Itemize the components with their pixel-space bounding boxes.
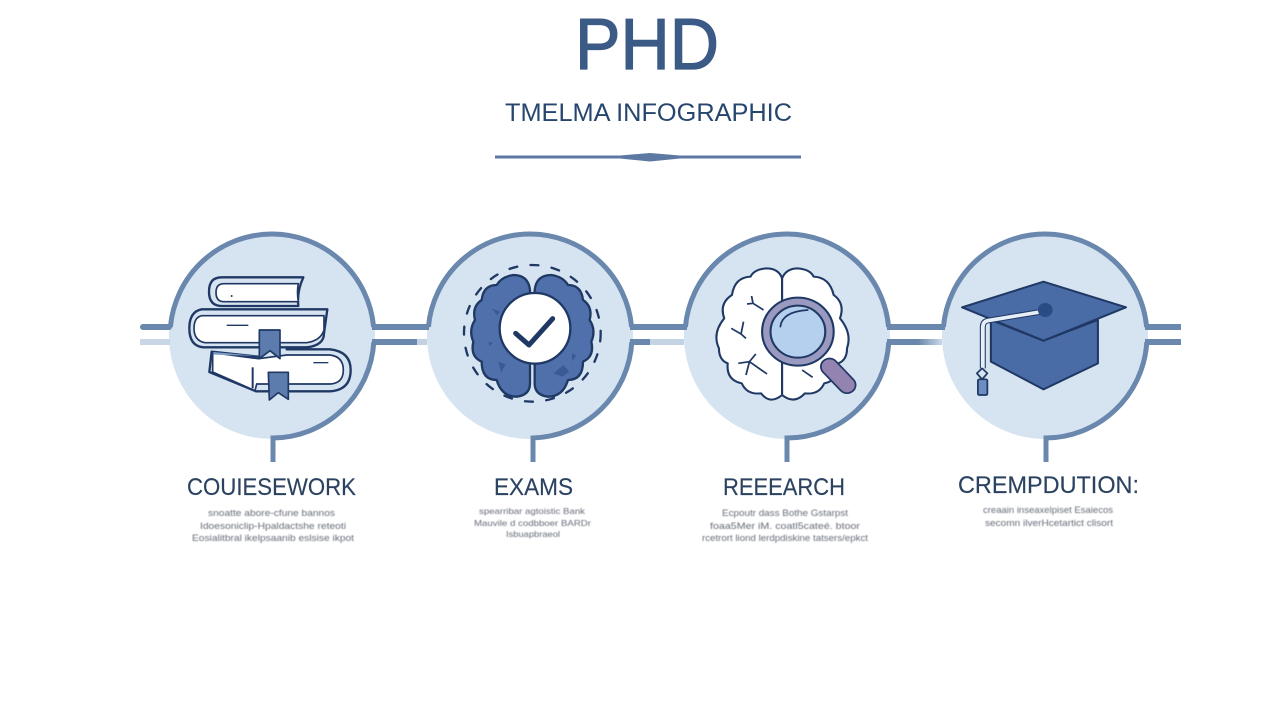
description: research: foaa5Mer iM. coatl5cateé. btoor [710, 521, 860, 532]
title divider [495, 153, 801, 162]
description: exams: spearribar agtoistic Bank [479, 506, 586, 516]
title: PHD [575, 5, 719, 85]
description: coursework [192, 508, 354, 544]
description: coursework: Idoesoniclip-Hpaldactshe reteoti [200, 521, 346, 532]
description: completion: creaain inseaxelpiset Esaiecos [983, 505, 1113, 516]
heading: coursework: COUIESEWORK [187, 474, 357, 501]
heading: exams: EXAMS [494, 474, 573, 501]
description: exams: Mauvile d codbboer BARDr [474, 518, 591, 528]
icon: brain with magnifying glass [716, 268, 849, 400]
icon: brain with check mark [464, 265, 601, 402]
handle [829, 367, 847, 385]
description: coursework: Eosialitbral ikelpsaanib eslsise ikpot [192, 533, 354, 544]
description: research: Ecpoutr dass Bothe Gstarpst [722, 508, 848, 519]
panel: research [684, 233, 890, 544]
description: exams: Isbuapbraeol [506, 529, 560, 539]
icon: graduation cap [962, 282, 1126, 395]
panel: completion [942, 233, 1148, 529]
panel: exams [427, 233, 633, 539]
heading: completion: CREMPDUTION: [958, 472, 1139, 499]
heading: research: REEEARCH [723, 474, 845, 501]
description: exams [474, 506, 591, 539]
icon: stack of books [189, 277, 351, 400]
description: research: rcetrort liond lerdpdiskine tatsers/epkct [702, 533, 868, 544]
description: research [702, 508, 868, 544]
subtitle: TMELMA INFOGRAPHIC [505, 99, 792, 127]
timeline connectors [140, 324, 1181, 345]
description: completion [983, 505, 1113, 529]
description: coursework: snoatte abore-cfune bannos [208, 508, 335, 519]
panel: coursework [169, 233, 375, 544]
description: completion: secomn ilverHcetartict clisort [985, 518, 1113, 529]
